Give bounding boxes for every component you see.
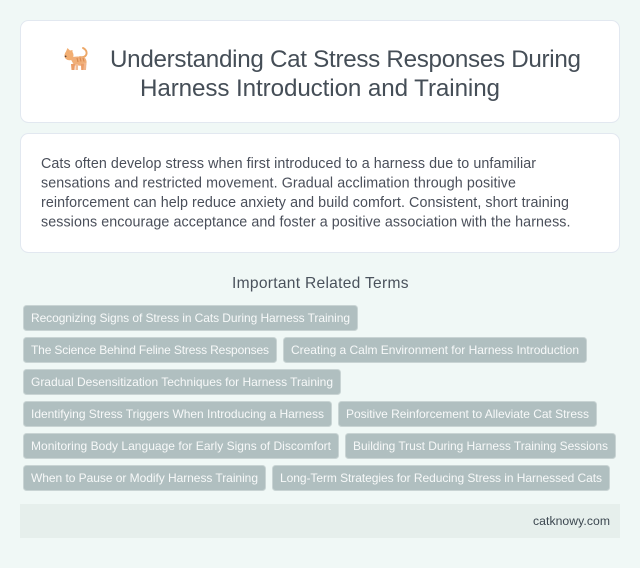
tag: when to pause: When to Pause or Modify Harness Training xyxy=(31,471,258,485)
tag: science behind xyxy=(24,338,276,362)
description text: reinforcement can help reduce anxiety and build comfort. Consistent, short training xyxy=(41,195,569,211)
tag: calm environment xyxy=(284,338,586,362)
panel: description card xyxy=(20,134,620,252)
tag: stress triggers xyxy=(24,402,332,426)
description text: Cats often develop stress when first introduced to a harness due to unfamiliar xyxy=(41,156,536,172)
tag: long-term strategies: Long-Term Strategies for Reducing Stress in Harnessed Cats xyxy=(280,471,602,485)
tag: when to pause xyxy=(24,466,266,490)
icon: cat xyxy=(64,48,87,70)
tag: positive reinforcement xyxy=(338,402,596,426)
tag: body language xyxy=(24,434,338,458)
tag: recognizing signs: Recognizing Signs of Stress in Cats During Harness Training xyxy=(31,311,350,325)
tag: gradual desensitization: Gradual Desensitization Techniques for Harness Training xyxy=(31,375,333,389)
tag: positive reinforcement: Positive Reinforcement to Alleviate Cat Stress xyxy=(346,407,589,421)
title text: Harness Introduction and Training xyxy=(140,75,500,102)
tag: long-term strategies xyxy=(272,466,610,490)
tag: body language: Monitoring Body Language for Early Signs of Discomfort xyxy=(31,439,332,453)
heading: important related terms: Important Related Terms xyxy=(232,275,409,292)
tag: building trust xyxy=(346,434,616,458)
description text xyxy=(41,156,570,230)
title text: Understanding Cat Stress Responses During xyxy=(110,46,581,73)
tag: calm environment: Creating a Calm Environment for Harness Introduction xyxy=(291,343,579,357)
title text xyxy=(110,46,581,102)
panel: related term tags xyxy=(24,306,616,490)
footer site name: catknowy.com xyxy=(533,514,610,528)
tag: science behind: The Science Behind Feline Stress Responses xyxy=(31,343,269,357)
tag: recognizing signs xyxy=(24,306,358,330)
tag: gradual desensitization xyxy=(24,370,340,394)
panel: footer xyxy=(20,504,620,538)
description text: sensations and restricted movement. Gradual acclimation through positive xyxy=(41,176,516,192)
tag: stress triggers: Identifying Stress Triggers When Introducing a Harness xyxy=(31,407,324,421)
tag: building trust: Building Trust During Harness Training Sessions xyxy=(353,439,608,453)
panel: title card xyxy=(20,20,620,122)
description text: sessions encourage acceptance and foster a positive association with the harness. xyxy=(41,214,570,230)
